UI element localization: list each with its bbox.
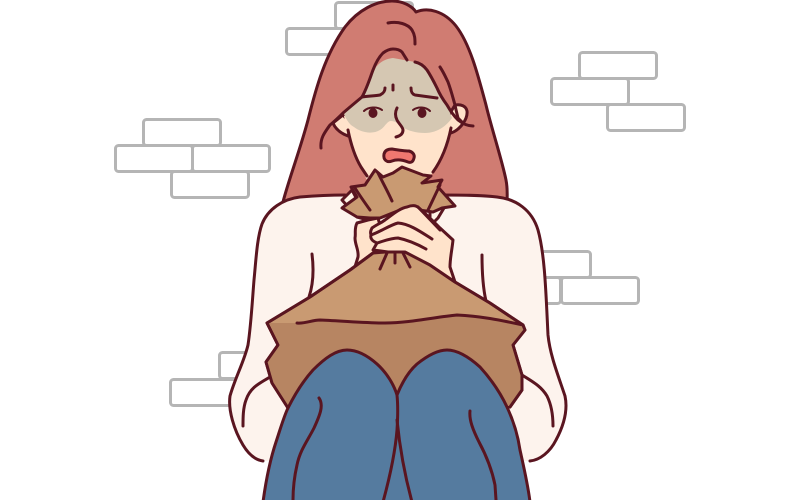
leg outlines [263, 350, 530, 500]
brows, eyes and nose [362, 85, 437, 137]
knee wrinkles [293, 398, 321, 500]
jeans legs [263, 350, 530, 500]
bricks: top centre cluster [286, 2, 412, 54]
face [344, 58, 452, 182]
bag seam [297, 315, 523, 325]
lower hand [354, 218, 384, 270]
hair [283, 1, 507, 205]
bag outline [266, 253, 525, 408]
mouth [384, 149, 414, 162]
bricks: middle right cluster [484, 252, 638, 304]
paper bag top knot [342, 167, 455, 218]
upper hand gripping bag [371, 206, 455, 282]
bag lower shade [267, 315, 524, 407]
ears [333, 105, 467, 136]
arm fold lines [243, 254, 553, 426]
paper bag body [266, 250, 525, 408]
gather lines [380, 253, 410, 269]
sweater outline [230, 195, 345, 461]
neck gaps [342, 190, 447, 226]
face outline [348, 130, 367, 176]
bricks: upper right cluster [552, 52, 684, 130]
anxiety shadow on face [344, 58, 452, 133]
bricks: lower left cluster [170, 352, 296, 406]
hair strands over face [321, 22, 473, 148]
finger lines [371, 223, 432, 239]
bricks: upper left cluster [116, 120, 270, 198]
sweater body and arms [230, 195, 566, 461]
knot creases [378, 173, 392, 201]
